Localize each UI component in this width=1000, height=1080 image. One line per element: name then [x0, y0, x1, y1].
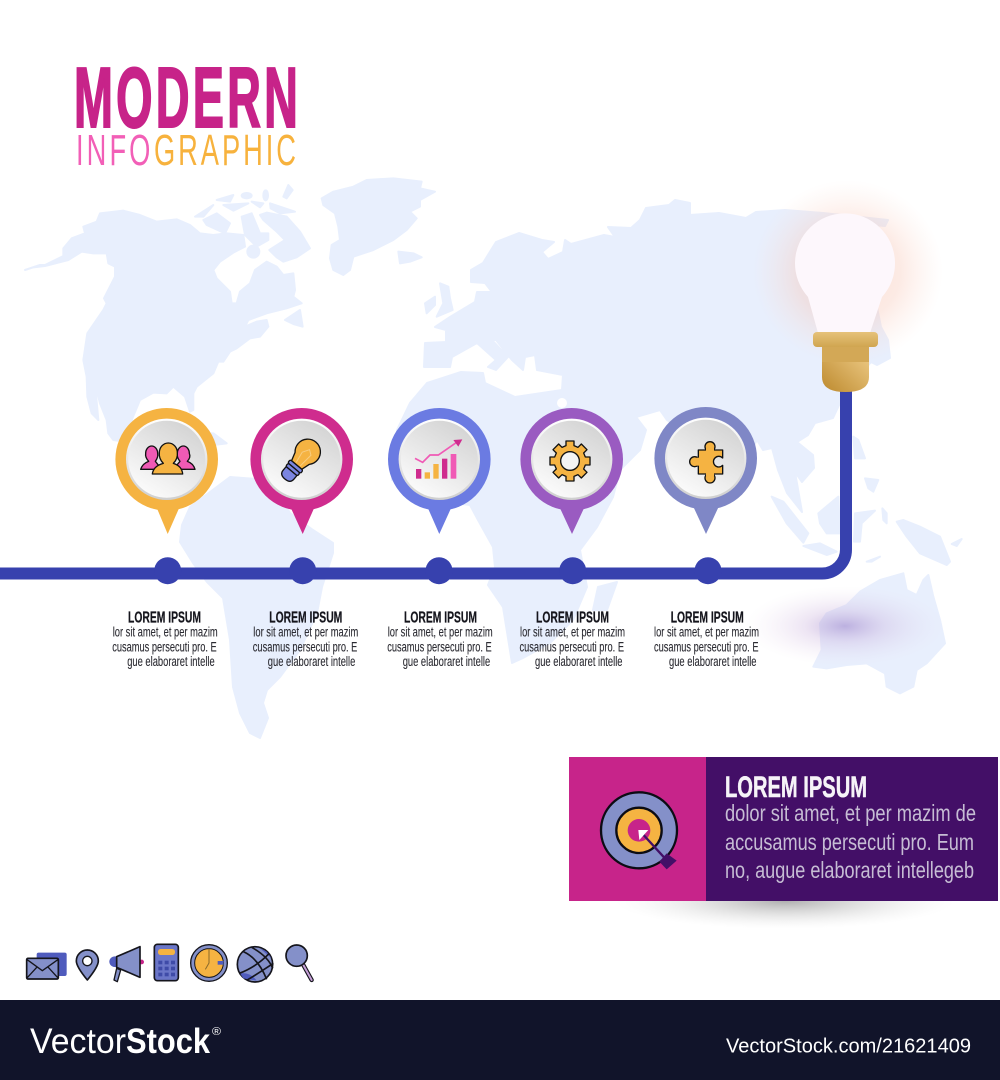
title line: MODERN: MODERN — [74, 50, 298, 146]
footer logo — [30, 1022, 221, 1061]
title line: INFOGRAPHIC — [76, 125, 296, 175]
icon: bulb — [275, 434, 326, 487]
pin 1: people — [115, 408, 218, 534]
panel shadow — [615, 873, 955, 929]
icon: megaphone — [109, 947, 144, 982]
footer bar — [0, 1000, 1000, 1080]
caption 3: cusamus persecuti pro. E — [387, 640, 492, 654]
bulb socket base — [822, 347, 869, 392]
pin 4: gear — [520, 408, 623, 534]
icon: envelope — [27, 953, 67, 979]
callout heading: LOREM IPSUM — [725, 771, 867, 804]
icon: gear — [550, 441, 590, 481]
footer logo: Stock — [126, 1022, 210, 1061]
Australia glow shadow — [745, 586, 945, 666]
caption 5 — [654, 610, 759, 669]
caption 4: LOREM IPSUM — [536, 610, 609, 627]
caption 1: gue elaboraret intelle — [127, 654, 215, 669]
footer logo: Vector — [30, 1022, 126, 1061]
pin 3: chart — [388, 408, 491, 534]
icon: puzzle piece — [690, 442, 723, 483]
timeline wire — [0, 385, 846, 574]
caption 5: lor sit amet, et per mazim — [654, 625, 759, 640]
icon: bar chart with arrow — [415, 439, 462, 479]
callout panel — [569, 757, 998, 901]
caption 1: cusamus persecuti pro. E — [112, 640, 217, 654]
title line: INFOGRAPHIC: GRAPHIC — [154, 125, 296, 175]
caption 4: gue elaboraret intelle — [535, 654, 622, 669]
icon: target with arrow — [601, 792, 677, 869]
caption 1 — [112, 610, 218, 669]
light bulb — [795, 213, 895, 392]
icon: globe — [237, 947, 273, 982]
caption 5: gue elaboraret intelle — [669, 654, 756, 669]
panel: purple block — [706, 757, 998, 901]
title — [74, 50, 298, 175]
icon: clock — [191, 945, 227, 981]
caption 2: LOREM IPSUM — [269, 610, 342, 627]
footer image id: VectorStock.com/21621409 — [726, 1036, 971, 1058]
panel: pink block — [569, 757, 706, 901]
caption 2: gue elaboraret intelle — [268, 654, 355, 669]
bulb glow — [753, 180, 943, 364]
caption 2: cusamus persecuti pro. E — [253, 640, 357, 654]
caption 2 — [253, 610, 358, 669]
icon: people — [141, 443, 195, 474]
title line: INFOGRAPHIC: INFO — [76, 125, 150, 175]
footer logo: ® — [212, 1026, 221, 1038]
caption 4: cusamus persecuti pro. E — [520, 640, 624, 654]
caption 4: lor sit amet, et per mazim — [520, 625, 625, 640]
icon: map pin — [76, 950, 98, 980]
caption 5: LOREM IPSUM — [671, 610, 744, 627]
caption 4 — [520, 610, 625, 669]
icon: magnifier — [286, 945, 312, 980]
caption 1: lor sit amet, et per mazim — [113, 625, 218, 640]
caption 2: lor sit amet, et per mazim — [253, 625, 358, 640]
caption 5: cusamus persecuti pro. E — [654, 640, 758, 654]
caption 3: lor sit amet, et per mazim — [388, 625, 493, 640]
pin 2: bulb — [250, 408, 353, 534]
pin 5: puzzle — [654, 407, 757, 534]
bulb cap — [813, 332, 878, 347]
caption 3: gue elaboraret intelle — [403, 654, 490, 669]
callout body text — [725, 800, 976, 883]
caption 3: LOREM IPSUM — [404, 610, 477, 627]
caption 1: LOREM IPSUM — [128, 610, 201, 627]
caption 3 — [387, 610, 493, 669]
bulb glass — [795, 213, 895, 333]
world map — [25, 178, 962, 738]
timeline dots — [154, 557, 721, 584]
icon: calculator — [154, 944, 178, 981]
bottom icon row — [27, 944, 312, 982]
